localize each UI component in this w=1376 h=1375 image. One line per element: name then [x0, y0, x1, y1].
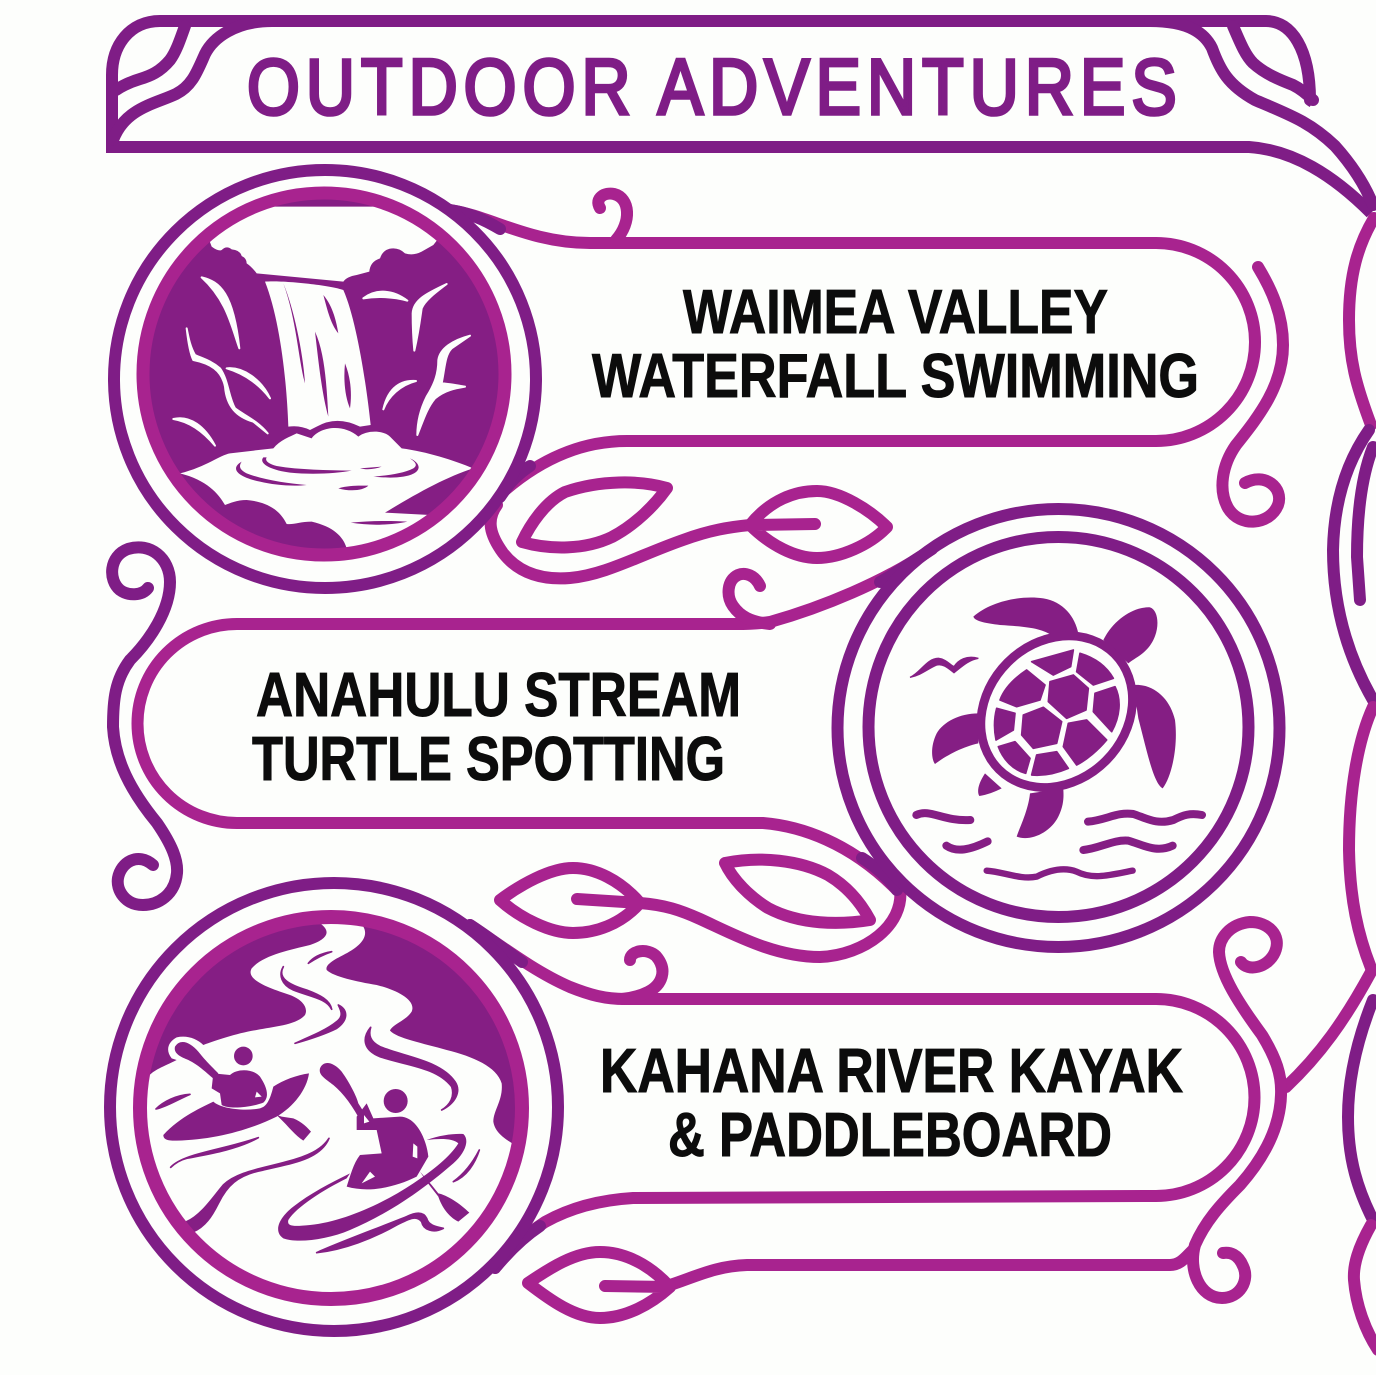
leaf with midrib — [528, 1252, 670, 1318]
river banks — [150, 924, 327, 1075]
bird — [910, 657, 978, 677]
leaf with midrib — [750, 491, 887, 558]
pill three right spiral — [1193, 922, 1281, 1298]
curl above pill two — [729, 574, 770, 624]
panel: Anahulu Stream pill: TURTLE SPOTTING — [252, 725, 725, 794]
leaf outline — [522, 482, 667, 547]
rock streaks — [173, 277, 470, 446]
water waves — [916, 813, 1202, 877]
pill one right spiral — [1222, 267, 1283, 522]
turtle flippers — [932, 597, 1176, 838]
lower vine with leaf — [528, 1250, 1193, 1318]
icon: sea turtle medallion — [838, 509, 1280, 947]
current streaks — [156, 952, 479, 1253]
leaf outline — [725, 860, 870, 923]
dark vine joints at medallions — [450, 210, 932, 1268]
panel: Waimea Valley pill: WATERFALL SWIMMING — [592, 342, 1199, 411]
icon: waterfall medallion — [114, 170, 536, 588]
waterfall — [265, 281, 371, 430]
title text: OUTDOOR ADVENTURES — [247, 42, 1177, 131]
second kayaker — [278, 1134, 466, 1241]
first kayaker — [163, 1073, 309, 1141]
sky and cliffs — [210, 206, 437, 282]
panel: Anahulu Stream pill — [138, 549, 932, 890]
left border vine with spirals — [112, 547, 177, 905]
vine with leaves between circle one and two — [491, 482, 887, 578]
title banner — [106, 21, 1373, 213]
panel: Kahana River pill — [470, 922, 1281, 1298]
curl above pill three — [622, 951, 662, 999]
pool — [180, 428, 473, 548]
panel: Waimea Valley pill — [450, 194, 1283, 522]
vine with leaves between circle two and three — [500, 860, 900, 957]
curl above pill one — [598, 194, 627, 240]
icon: kayak medallion — [110, 883, 558, 1331]
pill one text: WAIMEA VALLEY — [683, 278, 1108, 347]
leaf with midrib — [500, 868, 640, 933]
right border vine — [1286, 218, 1376, 1350]
turtle shell — [944, 599, 1170, 825]
pill three text: KAHANA RIVER KAYAK — [600, 1037, 1183, 1106]
panel: Kahana River pill: & PADDLEBOARD — [668, 1101, 1112, 1170]
pill two text: ANAHULU STREAM — [256, 661, 741, 730]
